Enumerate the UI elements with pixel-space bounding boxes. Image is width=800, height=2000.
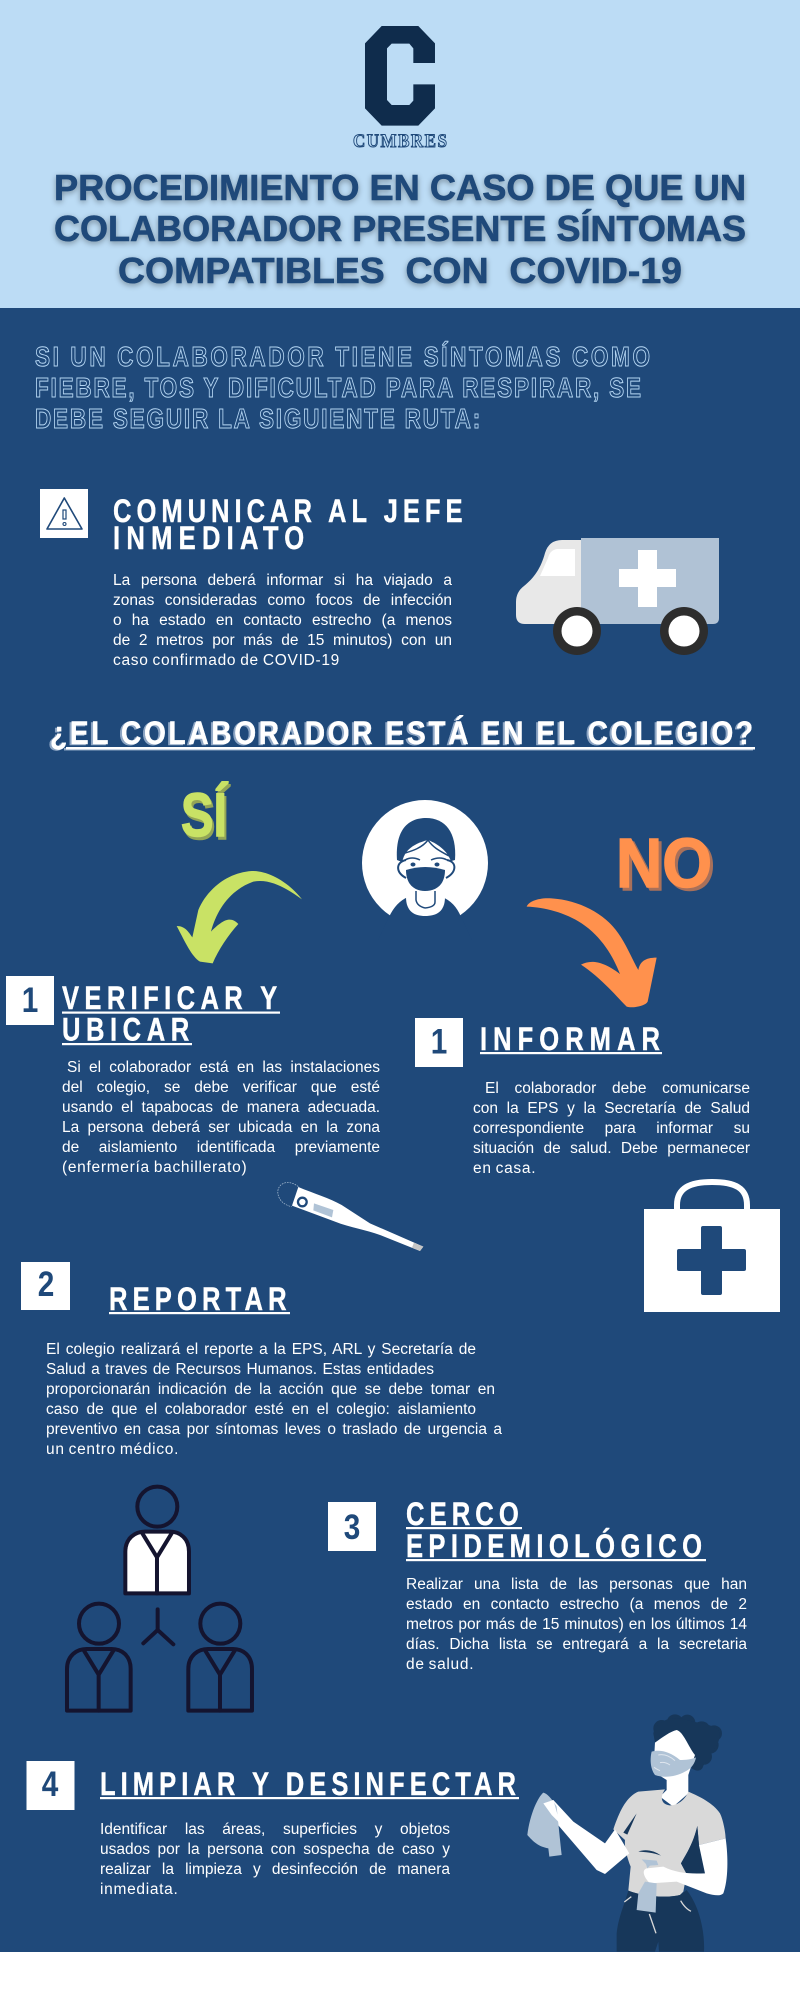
body text: Salud a traves de Recursos Humanos. Estas entidades	[46, 1361, 434, 1378]
panel: header band	[0, 0, 800, 308]
title	[54, 167, 746, 291]
body text: La persona deberá informar si ha viajado a	[113, 572, 452, 589]
icon: school logo C	[365, 26, 435, 126]
body text: realizar la limpieza y desinfección de manera	[100, 1861, 450, 1878]
body text: Si el colaborador está en las instalaciones	[67, 1059, 380, 1076]
body text: usando el tapabocas de manera adecuada.	[62, 1099, 380, 1116]
icon: warning box	[40, 489, 88, 538]
number box 4: 4	[42, 1765, 58, 1804]
label: no: NO	[616, 824, 712, 902]
icon: woman with mask cleaning	[527, 1714, 727, 1952]
logo wordmark: CUMBRES	[353, 130, 447, 151]
heading: INFORMAR	[480, 1022, 660, 1058]
body text	[113, 571, 458, 673]
body text	[100, 1820, 455, 1902]
body text	[406, 1575, 753, 1677]
body text: El colaborador debe comunicarse	[485, 1080, 750, 1097]
heading: CERCO	[406, 1497, 519, 1533]
number box 1: 1	[22, 981, 38, 1020]
heading: EPIDEMIOLÓGICO	[406, 1527, 702, 1565]
body text	[62, 1058, 387, 1180]
body text: días. Dicha lista se entregará a la secretaria	[406, 1636, 747, 1653]
icon: person with mask	[362, 800, 488, 940]
body text: El colegio realizará el reporte a la EPS, ARL y Secretaría de	[46, 1341, 476, 1358]
heading	[62, 981, 280, 1048]
body text: zonas consideradas como focos de infección	[113, 592, 452, 609]
body text: La persona deberá ser ubicada en la zona	[62, 1119, 380, 1136]
body text	[473, 1079, 755, 1181]
icon: ambulance	[516, 538, 719, 655]
number box 2	[21, 1262, 70, 1310]
panel: cerco epidemiologico	[328, 1497, 753, 1677]
body text: usados por la persona con sospecha de caso y	[100, 1841, 450, 1858]
body text	[46, 1340, 511, 1462]
body text: proporcionarán indicación de la acción que se debe tomar en	[46, 1381, 495, 1398]
body text: un centro médico.	[46, 1441, 179, 1458]
number box 4	[26, 1761, 74, 1810]
body text: de 2 metros por más de 15 minutos) con un	[113, 632, 452, 649]
heading	[113, 494, 463, 557]
heading: LIMPIAR Y DESINFECTAR	[100, 1767, 516, 1803]
panel: verificar y ubicar	[6, 976, 387, 1180]
body text: estado en contacto estrecho (a menos de 2	[406, 1596, 747, 1613]
intro outlined text: SI UN COLABORADOR TIENE SÍNTOMAS COMO	[35, 341, 650, 373]
arrow: orange	[527, 898, 657, 1007]
question heading: ¿EL COLABORADOR ESTÁ EN EL COLEGIO?	[50, 715, 753, 751]
body text: correspondiente para informar su	[473, 1120, 750, 1137]
intro outlined text	[35, 341, 650, 435]
body text: inmediata.	[100, 1881, 179, 1898]
body text: Realizar una lista de las personas que han	[406, 1576, 747, 1593]
heading	[406, 1497, 706, 1565]
label: si: SÍ	[181, 781, 229, 849]
heading: COMUNICAR AL JEFE	[113, 494, 463, 530]
number box 3	[328, 1502, 376, 1551]
number box 1	[415, 1018, 463, 1067]
body text: (enfermería bachillerato)	[62, 1159, 247, 1176]
heading: VERIFICAR Y	[62, 981, 277, 1017]
body text: Identificar las áreas, superficies y objetos	[100, 1821, 450, 1838]
number box 2: 2	[38, 1265, 54, 1304]
panel: informar	[415, 1018, 755, 1181]
panel: reportar	[21, 1262, 511, 1462]
intro outlined text: DEBE SEGUIR LA SIGUIENTE RUTA:	[35, 404, 480, 435]
body text: situación de salud. Debe permanecer	[473, 1140, 750, 1157]
body text: preventivo en casa por síntomas leves o traslado de urgencia a	[46, 1421, 502, 1438]
heading: REPORTAR	[109, 1282, 287, 1318]
icon: first aid kit	[644, 1182, 780, 1312]
panel: comunicar al jefe	[40, 489, 719, 673]
number box 1	[6, 976, 54, 1025]
icon: thermometer	[278, 1183, 423, 1251]
title: COMPATIBLES CON COVID-19	[118, 250, 682, 291]
title: PROCEDIMIENTO EN CASO DE QUE UN	[54, 167, 746, 208]
body text: del colegio, se debe verificar que esté	[62, 1079, 380, 1096]
intro outlined text: FIEBRE, TOS Y DIFICULTAD PARA RESPIRAR, SE	[35, 373, 641, 404]
heading: INMEDIATO	[113, 521, 304, 557]
icon: people hierarchy	[67, 1487, 252, 1711]
body text: o ha estado en contacto estrecho (a menos	[113, 612, 452, 629]
body text: metros por más de 15 minutos) en los últimos 14	[406, 1616, 747, 1633]
number box 1: 1	[431, 1022, 447, 1061]
title: COLABORADOR PRESENTE SÍNTOMAS	[54, 208, 746, 249]
body text: de aislamiento identificada previamente	[62, 1139, 380, 1156]
panel: limpiar y desinfectar	[26, 1761, 519, 1902]
heading: UBICAR	[62, 1013, 189, 1048]
body text: de salud.	[406, 1656, 474, 1673]
body text: con la EPS y la Secretaría de Salud	[473, 1100, 750, 1117]
number box 3: 3	[344, 1508, 360, 1547]
body text: caso confirmado de COVID-19	[113, 652, 340, 669]
body text: en casa.	[473, 1160, 536, 1177]
body text: caso de que el colaborador esté en el colegio: aislamiento	[46, 1401, 476, 1418]
arrow: green	[177, 871, 302, 963]
